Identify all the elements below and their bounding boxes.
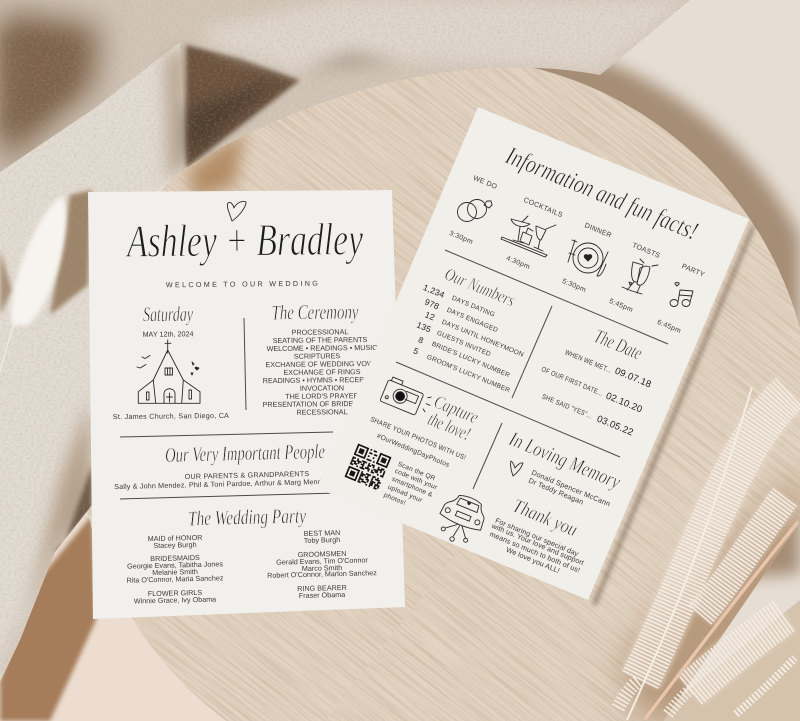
column divider bbox=[244, 318, 246, 410]
icon: church bbox=[137, 340, 200, 403]
dinner bbox=[561, 222, 613, 294]
the date: OF OUR FIRST DATE... bbox=[540, 366, 604, 398]
bride side: Stacey Burgh bbox=[153, 540, 197, 550]
ceremony order: EXCHANGE OF WEDDING VOWS bbox=[265, 359, 379, 369]
bride side: Winnie Grace, Ivy Obama bbox=[134, 594, 216, 606]
wedding party bbox=[126, 504, 377, 606]
hashtag: #OurWeddingDayPhotos bbox=[376, 433, 451, 469]
the date bbox=[540, 325, 653, 438]
divider bbox=[120, 432, 333, 437]
information card bbox=[317, 107, 749, 600]
groom side: Marco Smith bbox=[302, 563, 342, 573]
bride side: FLOWER GIRLS bbox=[148, 588, 202, 598]
party: PARTY bbox=[680, 263, 706, 279]
cocktails: 4:30pm bbox=[505, 255, 531, 271]
the date: 02.10.20 bbox=[604, 391, 644, 415]
column divider bbox=[512, 306, 552, 398]
numbers labels: GROOM'S LUCKY NUMBER bbox=[426, 354, 511, 394]
groom side: RING BEARER bbox=[297, 583, 347, 593]
memory names: Donald Spencer McCann bbox=[530, 468, 612, 508]
groom side: GROOMSMEN bbox=[298, 549, 346, 559]
party bbox=[656, 263, 706, 335]
info heading: Information and fun facts! bbox=[501, 140, 702, 246]
ceremony order: WELCOME • READINGS • MUSIC bbox=[267, 343, 377, 353]
thank you bbox=[488, 495, 585, 575]
memory heading: In Loving Memory bbox=[505, 426, 625, 494]
date: MAY 12th, 2024 bbox=[143, 329, 193, 339]
names heading: Ashley + Bradley bbox=[125, 213, 364, 267]
pampas feather on cloth bbox=[0, 196, 66, 372]
numbers values: 978 bbox=[423, 297, 441, 311]
we do: WE DO bbox=[472, 175, 498, 191]
numbers labels bbox=[426, 295, 525, 394]
bride side: Georgie Evans, Tabitha Jones bbox=[127, 559, 223, 571]
numbers labels: DAYS ENGAGED bbox=[446, 307, 499, 334]
icon: getaway car bbox=[432, 489, 491, 550]
ceremony order: RECESSIONAL bbox=[296, 407, 348, 417]
party: 6:45pm bbox=[656, 319, 682, 335]
parents label: OUR PARENTS & GRANDPARENTS bbox=[185, 469, 309, 481]
the date: 03.05.22 bbox=[595, 414, 635, 438]
divider bbox=[396, 362, 620, 457]
date heading: The Date bbox=[591, 325, 645, 365]
divider bbox=[120, 493, 338, 499]
we do: 3:30pm bbox=[448, 230, 474, 246]
ceremony column bbox=[263, 300, 381, 417]
toasts: 5:45pm bbox=[608, 298, 634, 314]
column divider bbox=[473, 423, 502, 489]
important people heading: Our Very Important People bbox=[165, 439, 325, 467]
important people bbox=[114, 439, 330, 491]
capture the love: the love! bbox=[425, 409, 473, 445]
numbers values: 135 bbox=[415, 320, 433, 334]
dinner: DINNER bbox=[583, 222, 613, 240]
ceremony order: INVOCATION bbox=[300, 383, 344, 393]
numbers labels: BRIDE'S LUCKY NUMBER bbox=[431, 341, 511, 379]
ceremony order: SEATING OF THE PARENTS bbox=[273, 335, 368, 345]
divider bbox=[445, 250, 668, 344]
cocktails bbox=[501, 197, 564, 271]
groom side: Gerald Evans, Tim O'Connor bbox=[276, 555, 369, 567]
bride side: Melanie Smith bbox=[152, 567, 198, 577]
numbers values: 8 bbox=[417, 334, 425, 346]
dried fern fronds bbox=[618, 387, 798, 720]
ceremony order: PRESENTATION OF BRIDE bbox=[263, 399, 354, 409]
ceremony order: READINGS • HYMNS • RECEPTION bbox=[263, 375, 381, 385]
QR instructions bbox=[383, 461, 439, 507]
QR instructions: photos! bbox=[383, 492, 407, 507]
thank you message: We love you ALL! bbox=[505, 545, 561, 575]
capture heading: Capture bbox=[431, 392, 481, 428]
numbers values bbox=[412, 282, 446, 357]
the date: SHE SAID "YES"... bbox=[541, 393, 593, 421]
QR code bbox=[345, 444, 391, 490]
thank you message: with us. Your love and support bbox=[490, 521, 585, 567]
shadow under information card bbox=[592, 224, 755, 606]
we do bbox=[448, 175, 498, 246]
in loving memory: Dr Teddy Reagan bbox=[527, 476, 585, 507]
icon: heart bbox=[227, 201, 246, 221]
program card bbox=[88, 190, 405, 619]
numbers labels: DAYS UNTIL HONEYMOON bbox=[441, 319, 525, 359]
numbers labels: DAYS DATING bbox=[451, 295, 496, 319]
ceremony order bbox=[263, 327, 381, 417]
icon: camera bbox=[380, 376, 435, 419]
capture the love bbox=[345, 376, 481, 507]
dinner: 5:30pm bbox=[561, 278, 587, 294]
cocktails: COCKTAILS bbox=[522, 197, 564, 219]
QR instructions: code with your bbox=[394, 468, 439, 492]
ceremony order: PROCESSIONAL bbox=[292, 327, 348, 337]
the date: 09.07.18 bbox=[613, 366, 653, 390]
the date: WHEN WE MET... bbox=[564, 349, 612, 375]
bride side: BRIDESMAIDS bbox=[150, 553, 200, 563]
groom side: Toby Burgh bbox=[304, 535, 340, 545]
bride side: MAID of HONOR bbox=[148, 533, 202, 543]
bride side bbox=[126, 533, 224, 606]
icon: heart bbox=[511, 461, 523, 476]
thank you message: means so much to both of us! bbox=[488, 529, 582, 575]
numbers values: 5 bbox=[412, 345, 420, 357]
groom side: BEST MAN bbox=[304, 528, 340, 538]
groom side: Fraser Obama bbox=[299, 590, 345, 600]
parents names: Sally & John Mendez, Phil & Toni Pardoe, Arthur & Marg Mendez bbox=[114, 477, 330, 491]
welcome line: WELCOME TO OUR WEDDING bbox=[166, 279, 320, 289]
numbers values: 12 bbox=[424, 309, 437, 323]
venue: St. James Church, San Diego, CA bbox=[113, 411, 229, 421]
QR instructions: smartphone & bbox=[391, 476, 434, 499]
our numbers bbox=[412, 264, 525, 394]
share text: SHARE YOUR PHOTOS WITH US! bbox=[369, 416, 467, 462]
ceremony heading: The Ceremony bbox=[271, 300, 359, 324]
Saturday heading: Saturday bbox=[143, 302, 194, 326]
ceremony order: THE LORD'S PRAYER bbox=[285, 391, 359, 401]
wedding party heading: The Wedding Party bbox=[188, 504, 307, 530]
toasts: TOASTS bbox=[631, 242, 661, 260]
groom side bbox=[267, 528, 377, 600]
thank you message: For sharing our special day bbox=[494, 516, 580, 558]
ceremony order: EXCHANGE OF RINGS bbox=[283, 367, 361, 377]
numbers labels: GUESTS INVITED bbox=[436, 330, 492, 358]
schedule row bbox=[448, 175, 706, 335]
ceremony order: SCRIPTURES bbox=[294, 351, 340, 361]
groom side: Robert O'Connor, Marlon Sanchez bbox=[267, 568, 377, 580]
thank you heading: Thank you bbox=[509, 495, 581, 541]
bride side: Rita O'Connor, Maria Sanchez bbox=[126, 573, 224, 585]
date column bbox=[113, 302, 229, 421]
numbers heading: Our Numbers bbox=[442, 264, 518, 310]
in loving memory bbox=[505, 426, 625, 508]
QR instructions: upload your bbox=[387, 484, 424, 504]
numbers values: 1,234 bbox=[422, 282, 446, 300]
toasts bbox=[608, 242, 661, 314]
QR instructions: Scan the QR bbox=[397, 461, 436, 482]
